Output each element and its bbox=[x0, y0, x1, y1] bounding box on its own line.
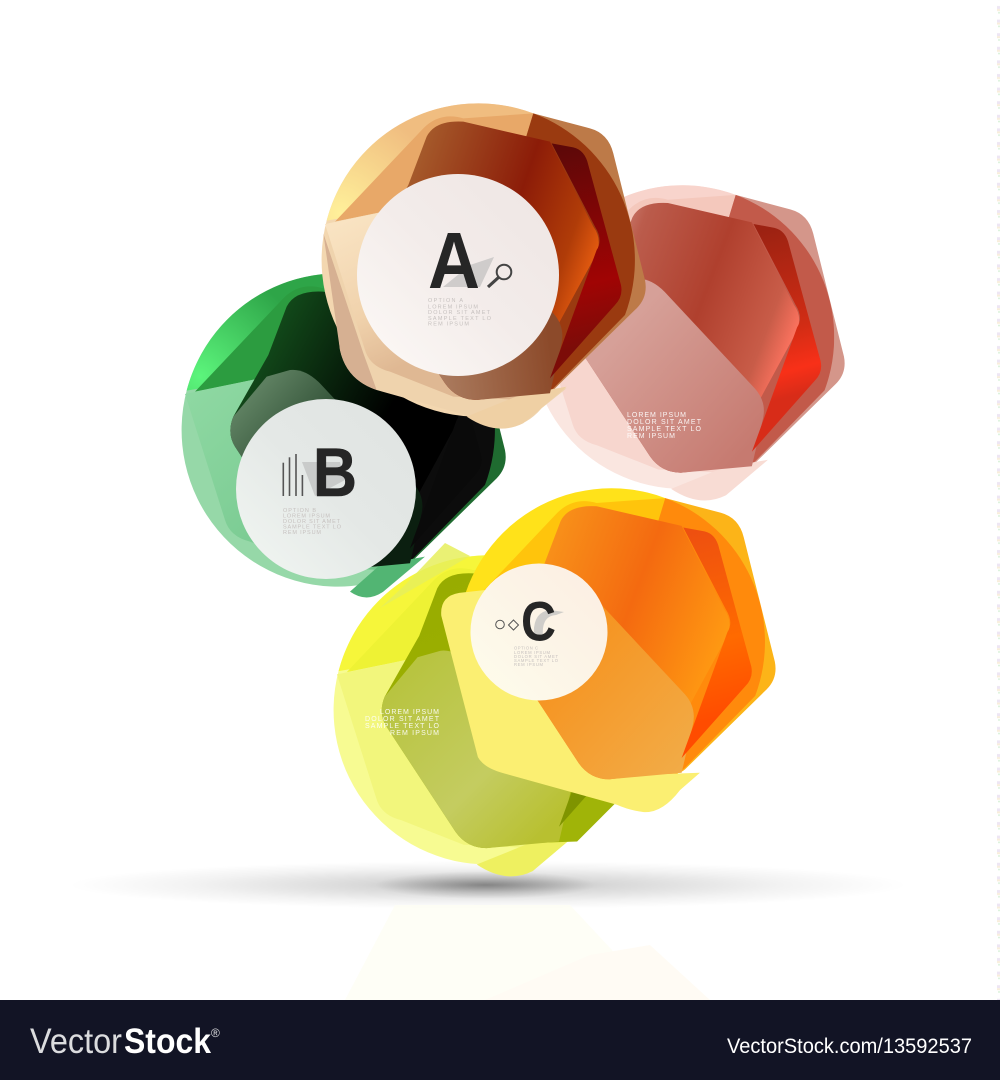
floor reflection bbox=[345, 905, 710, 1000]
text block: option A: LOREM IPSUM bbox=[428, 304, 478, 310]
floor shadow bbox=[68, 861, 908, 909]
footer bar bbox=[0, 1000, 1000, 1080]
text block: option C: DOLOR SIT AMET bbox=[514, 654, 558, 659]
icon: bars bbox=[283, 454, 302, 496]
text block: yellow-green bubble: REM IPSUM bbox=[390, 730, 439, 737]
text block: yellow-green bubble bbox=[365, 709, 440, 737]
letter B: B bbox=[313, 434, 357, 511]
text block: option A bbox=[428, 298, 492, 328]
text block: option C bbox=[514, 646, 559, 667]
footer logo bbox=[30, 1022, 220, 1061]
bubble B: green bbox=[182, 273, 506, 597]
text block: option B: LOREM IPSUM bbox=[283, 514, 330, 520]
circle panel: B bbox=[236, 399, 416, 579]
icon: circle and diamond bbox=[496, 620, 518, 630]
text block: option B: SAMPLE TEXT LO bbox=[283, 524, 342, 530]
text block: option C: OPTION C bbox=[514, 646, 538, 650]
bubble: yellow-green bbox=[334, 555, 614, 876]
circle panel: C bbox=[470, 564, 608, 700]
text block: option B: REM IPSUM bbox=[283, 530, 321, 536]
letter shadow: A bbox=[443, 257, 494, 287]
text block: option A: OPTION A bbox=[428, 298, 463, 304]
sliver: yellow-green tip over green bbox=[380, 543, 470, 608]
text block: option A: REM IPSUM bbox=[428, 322, 469, 328]
text block: yellow-green bubble: SAMPLE TEXT LO bbox=[365, 723, 440, 730]
text block: yellow-green bubble: DOLOR SIT AMET bbox=[365, 716, 440, 723]
bubble C: orange bbox=[441, 488, 776, 812]
text block: option B: OPTION B bbox=[283, 508, 316, 514]
bubble A: brown-orange bbox=[322, 103, 646, 429]
text block: red bubble bbox=[627, 412, 702, 440]
text block: yellow-green bubble: LOREM IPSUM bbox=[380, 709, 439, 716]
text block: red bubble: LOREM IPSUM bbox=[627, 412, 686, 419]
circle panel: A bbox=[357, 174, 559, 376]
letter C: C bbox=[521, 590, 556, 652]
icon: magnifier bbox=[488, 265, 511, 287]
text block: option C: SAMPLE TEXT LO bbox=[514, 658, 559, 663]
text block: option A: DOLOR SIT AMET bbox=[428, 310, 491, 316]
text block: red bubble: REM IPSUM bbox=[627, 433, 675, 440]
text block: red bubble: SAMPLE TEXT LO bbox=[627, 426, 702, 433]
bubble: red bbox=[531, 185, 845, 500]
footer logo: Vector bbox=[30, 1022, 122, 1061]
letter shadow: C bbox=[534, 610, 564, 637]
text block: red bubble: DOLOR SIT AMET bbox=[627, 419, 702, 426]
letter shadow: B bbox=[302, 462, 345, 496]
footer logo: Stock bbox=[124, 1022, 211, 1061]
text block: option C: LOREM IPSUM bbox=[514, 650, 550, 655]
text block: option B bbox=[283, 508, 342, 536]
footer image id: VectorStock.com/13592537 bbox=[727, 1035, 972, 1058]
text block: option C: REM IPSUM bbox=[514, 662, 544, 667]
footer logo: ® bbox=[211, 1026, 220, 1040]
text block: option A: SAMPLE TEXT LO bbox=[428, 316, 492, 322]
text block: option B: DOLOR SIT AMET bbox=[283, 519, 341, 525]
letter A: A bbox=[428, 216, 480, 305]
